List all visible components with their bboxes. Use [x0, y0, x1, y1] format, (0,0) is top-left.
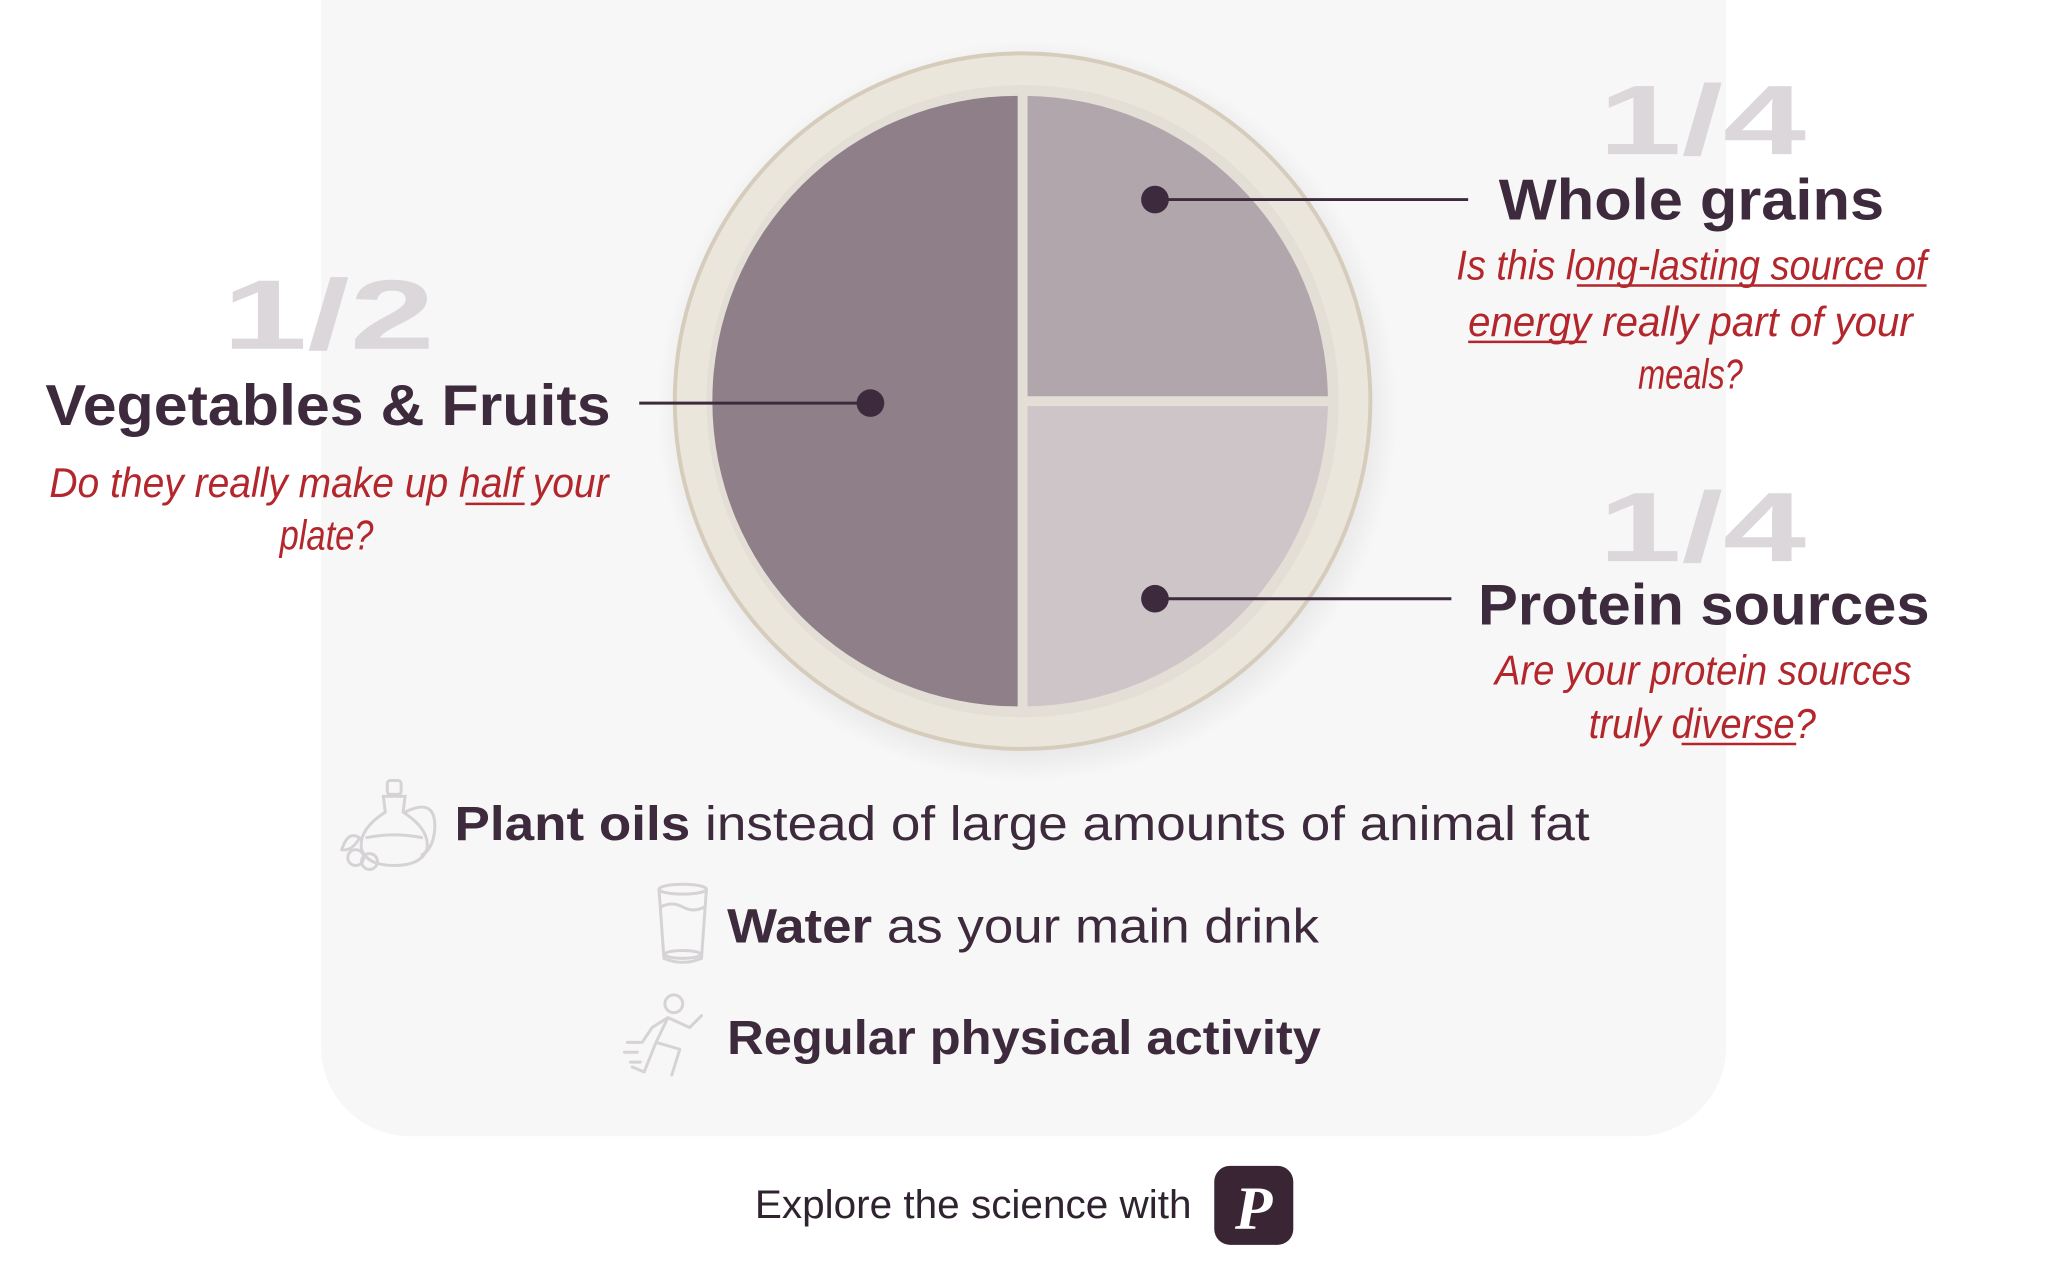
label: protein sources: 1/4: [1599, 472, 1806, 582]
plate section: vegetables & fruits half: [712, 96, 1018, 706]
label: protein sources: [1141, 472, 1930, 747]
label: vegetables & fruits: Do they really make up half your: [49, 459, 611, 506]
plate section: protein quarter: [1028, 406, 1328, 706]
label: whole grains: 1/4: [1599, 65, 1806, 175]
label: whole grains: Is this long-lasting source of: [1456, 242, 1931, 289]
label: whole grains: Whole grains: [1499, 168, 1884, 232]
icon: oil bottle: [342, 781, 435, 869]
text: plant oils: Plant oils instead of large amounts of animal fat: [454, 797, 1590, 851]
text: water: Water as your main drink: [727, 900, 1320, 954]
footer: logo: P: [1234, 1175, 1273, 1243]
icon: water glass: [659, 884, 706, 962]
panel: background card: [321, 0, 1726, 1136]
footer: logo: [1214, 1166, 1293, 1245]
icon: runner: [624, 995, 701, 1075]
label: vegetables & fruits: plate?: [278, 511, 373, 558]
label: vegetables & fruits: Vegetables & Fruits: [45, 374, 611, 438]
label: protein sources: Are your protein sources: [1492, 647, 1912, 694]
label: whole grains: meals?: [1638, 350, 1743, 397]
label: whole grains: [1141, 65, 1931, 397]
label: protein sources: Protein sources: [1478, 573, 1930, 637]
label: whole grains: energy really part of your: [1468, 298, 1915, 345]
label: protein sources: truly diverse?: [1589, 700, 1816, 747]
footer: explore text: Explore the science with: [755, 1183, 1192, 1227]
label: vegetables & fruits: 1/2: [222, 260, 435, 370]
plate section: whole grains quarter: [1028, 96, 1328, 396]
plate: [657, 41, 1398, 782]
label: vegetables & fruits: [45, 260, 884, 558]
text: physical activity: Regular physical activity: [727, 1011, 1321, 1065]
